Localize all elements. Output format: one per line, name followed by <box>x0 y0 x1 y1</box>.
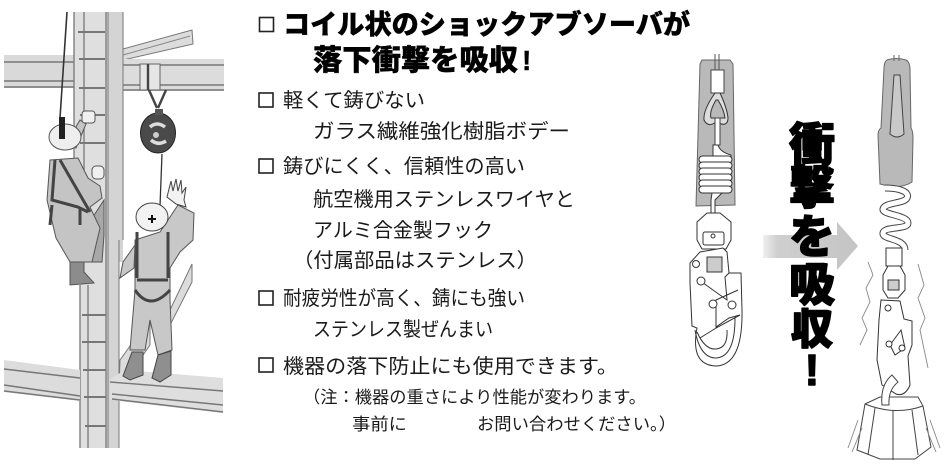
feature 1 line 2: ガラス繊維強化樹脂ボデー <box>313 120 570 143</box>
feature 3 line 2: ステンレス製ぜんまい <box>313 318 493 341</box>
feature 4 text <box>259 355 676 434</box>
cable <box>894 55 899 61</box>
cable and ferrule <box>715 54 719 70</box>
diagonal brace <box>110 30 193 390</box>
!: ! <box>805 346 819 395</box>
snap hook <box>690 248 742 366</box>
checkbox <box>259 159 273 173</box>
absorber body <box>878 58 913 187</box>
note line 2 part 1: 事前に <box>352 415 407 434</box>
upper left beam <box>4 55 76 88</box>
note line 1: （注：機器の重さにより性能が変わります。 <box>303 388 646 407</box>
steel column <box>108 12 123 448</box>
swivel link <box>697 213 731 249</box>
vertical heading <box>789 119 835 395</box>
window slot <box>890 75 904 137</box>
title line 1: コイル状のショックアブソーバが <box>283 9 690 40</box>
feature 2 text <box>259 155 575 272</box>
retractable fall arrester <box>140 109 176 153</box>
を: を <box>789 211 835 263</box>
feature 2 line 3: アルミ合金製フック <box>313 219 493 242</box>
lower right beam <box>110 370 223 413</box>
撃: 撃 <box>789 162 835 214</box>
title checkbox <box>260 18 274 32</box>
beam clamp and lanyard hooks <box>140 64 166 108</box>
motion lines <box>848 262 940 452</box>
absorber body <box>696 60 735 206</box>
weight <box>857 375 931 460</box>
吸: 吸 <box>789 259 835 311</box>
note line 2 part 2: お問い合わせください。） <box>477 415 676 434</box>
feature 3 text <box>259 287 525 341</box>
feature 4 line 1: 機器の落下防止にも使用できます。 <box>283 355 618 378</box>
swivel and hook <box>877 248 912 395</box>
ladder <box>74 12 109 448</box>
feature 1 text <box>259 89 570 143</box>
lower left beam <box>4 360 80 401</box>
retractable wire <box>160 154 162 206</box>
収: 収 <box>791 306 833 353</box>
upper right beam <box>110 59 224 91</box>
stretched coil spring <box>883 188 908 250</box>
feature 2 line 2: 航空機用ステンレスワイヤと <box>313 188 575 211</box>
title heading <box>260 9 690 77</box>
feature 2 line 4: （付属部品はステンレス） <box>293 249 537 272</box>
feature 2 line 1: 鋳びにくく、信頼性の高い <box>283 155 525 178</box>
icon: shock absorber before impact <box>690 54 742 366</box>
checkbox <box>259 291 273 305</box>
checkbox <box>259 93 273 107</box>
feature 3 line 1: 耐疲労性が高く、錆にも強い <box>283 287 525 310</box>
thimble <box>704 93 728 125</box>
title exclamation: ! <box>522 45 531 76</box>
standing worker <box>120 179 194 382</box>
coil spring <box>699 145 732 222</box>
climber lifeline <box>60 12 67 118</box>
title line 2: 落下衝撃を吸収 <box>313 44 518 77</box>
feature 1 line 1: 軽くて鋳びない <box>283 89 425 112</box>
illustration: workers on steel frame <box>4 12 224 448</box>
衝: 衝 <box>789 119 835 171</box>
arrow <box>763 222 858 270</box>
checkbox <box>259 358 273 372</box>
icon: shock absorber extended under load <box>848 55 940 460</box>
climbing worker <box>47 111 104 285</box>
